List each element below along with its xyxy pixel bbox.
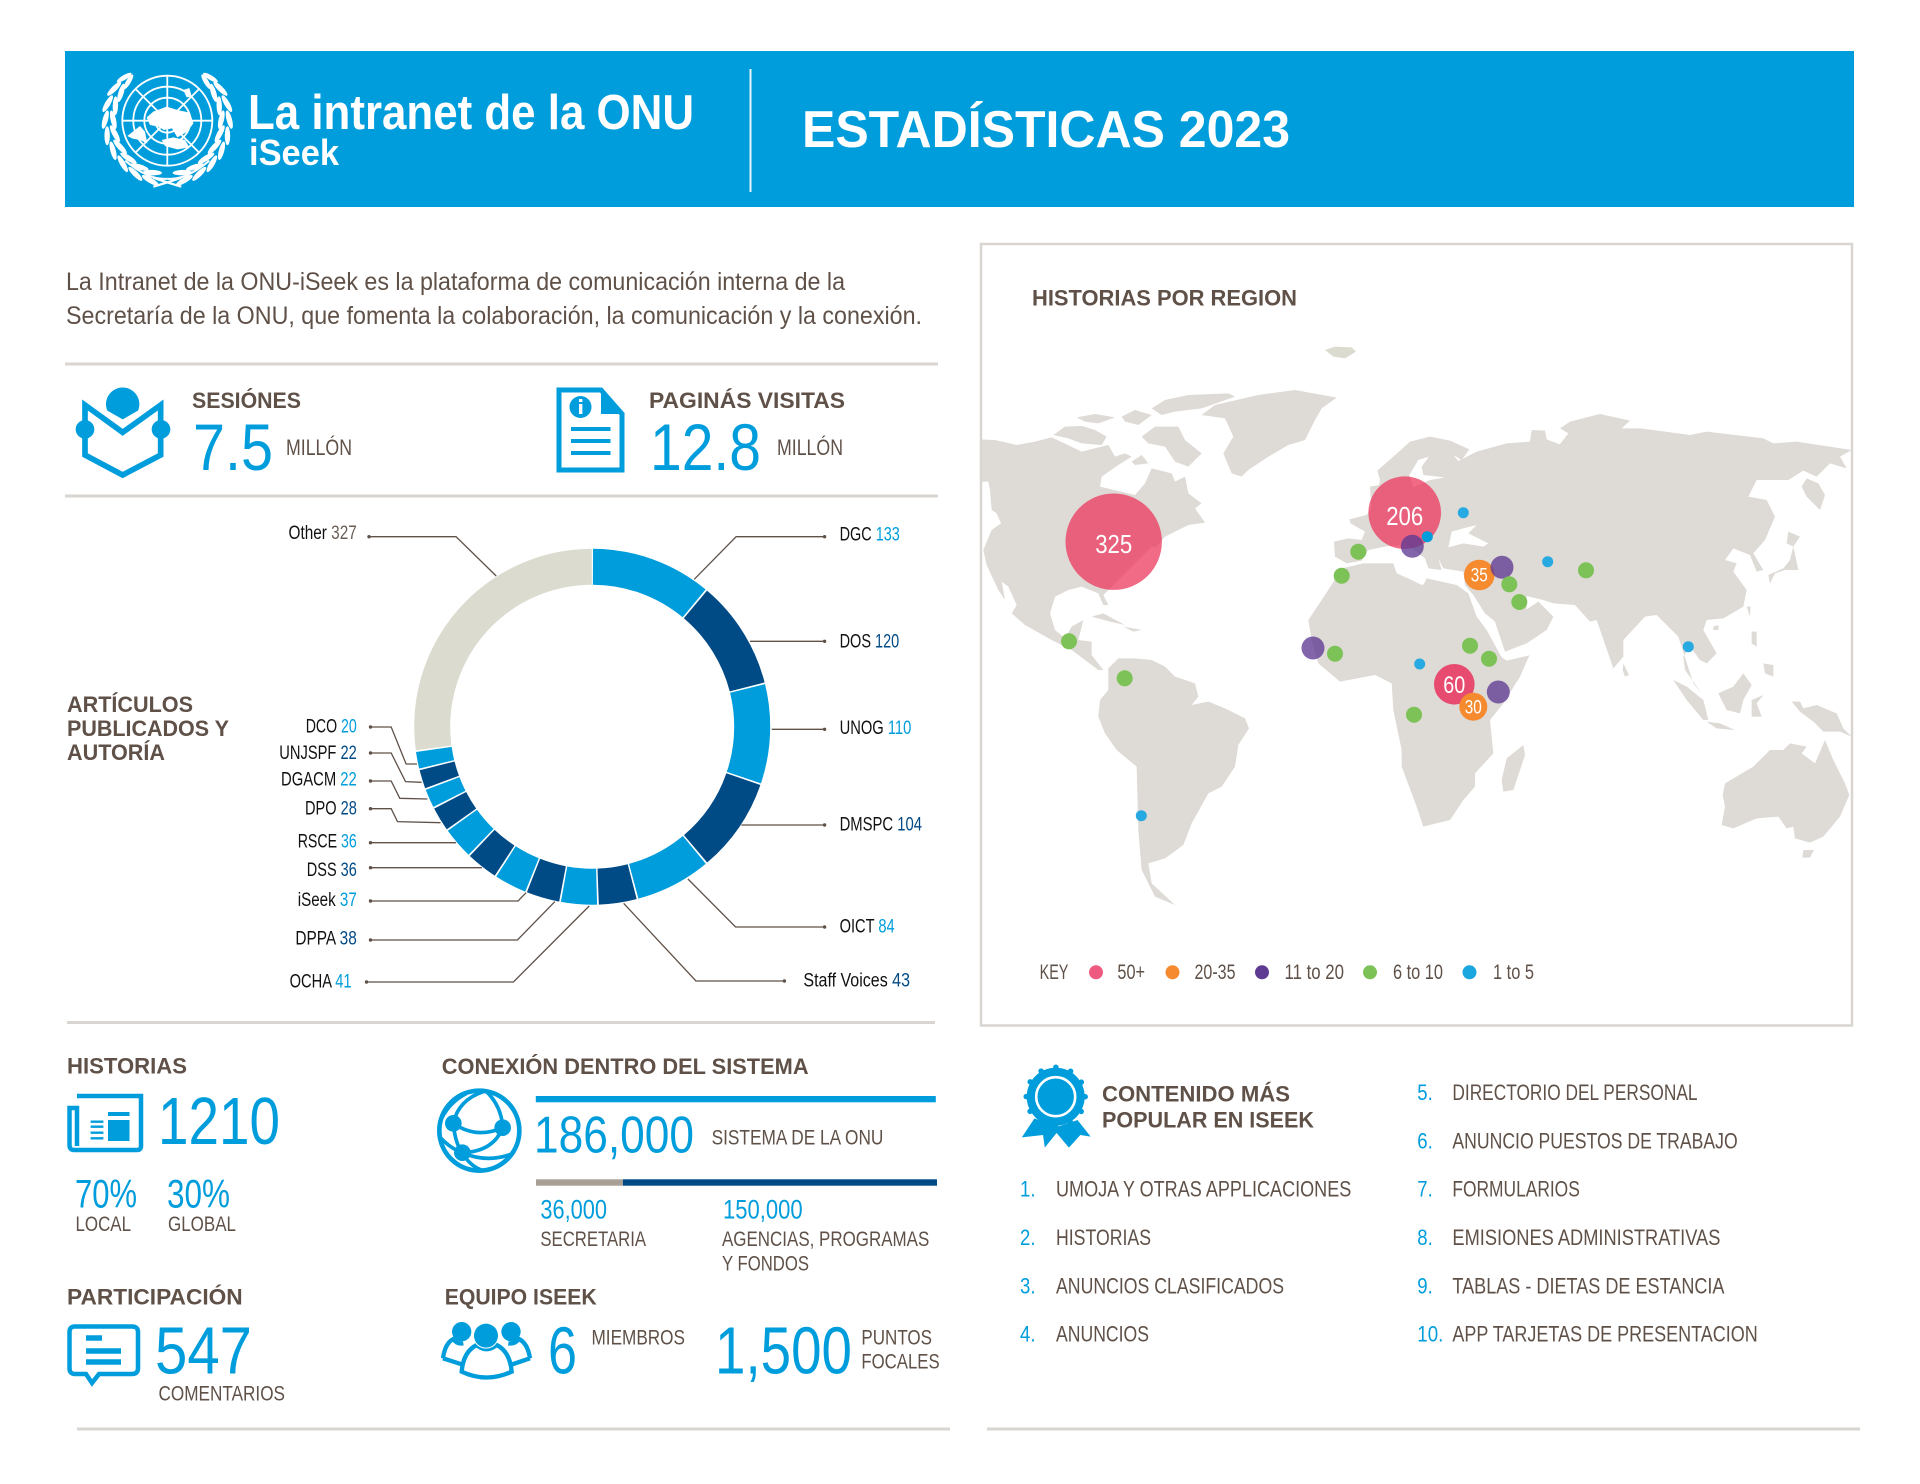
number: 1,500: 1,500 (715, 1313, 852, 1388)
heading: paginas visitas: PAGINÁS VISITAS (649, 388, 845, 413)
panel: participacion (67, 1284, 285, 1406)
stat: local 70%: LOCAL (76, 1212, 131, 1236)
icon: comment (70, 1326, 138, 1383)
ranked list: items 5 to 10: 5. (1417, 1080, 1433, 1105)
ranked list: items 1 to 4: 2. (1020, 1225, 1036, 1250)
label: puntos focales (861, 1325, 940, 1374)
stat: secretaria (540, 1194, 647, 1251)
donut labels left (279, 523, 357, 992)
ranked list: items 1 to 4: 3. (1020, 1273, 1036, 1298)
panel: historias por region (978, 244, 1852, 1026)
map key: 11 to 20 (1284, 961, 1344, 984)
ranked list: items 5 to 10: ANUNCIO PUESTOS DE TRABAJO (1452, 1128, 1738, 1153)
unit: millón: MILLÓN (286, 435, 352, 460)
label: comentarios: COMENTARIOS (158, 1382, 285, 1406)
donut labels left: DPPA 38 (295, 929, 357, 950)
map key: 6 to 10 (1393, 961, 1443, 984)
stat: agencias (722, 1194, 929, 1276)
panel: conexion dentro del sistema (439, 1054, 937, 1276)
heading: historias por region: HISTORIAS POR REGION (1032, 286, 1297, 310)
ranked list: items 1 to 4: HISTORIAS (1056, 1225, 1151, 1250)
heading: articulos publicados y autoria: PUBLICADOS Y (67, 716, 229, 741)
ranked list: items 1 to 4 (1020, 1177, 1351, 1347)
stat: global 30%: 30% (167, 1173, 230, 1217)
map key (1040, 961, 1534, 984)
leader lines (367, 537, 825, 982)
icon: document (559, 388, 625, 470)
ranked list: items 1 to 4: UMOJA Y OTRAS APPLICACIONES (1056, 1177, 1351, 1202)
title: La intranet de la ONU: La intranet de la ONU (248, 86, 694, 140)
unit: millón: MILLÓN (777, 435, 843, 460)
panel: sesiones (76, 387, 352, 484)
donut labels right: DMSPC 104 (840, 815, 922, 836)
markers: 1 to 5 (1136, 507, 1694, 821)
bubble: 325 stories (1066, 494, 1162, 590)
donut chart (432, 567, 752, 887)
ranked list: items 5 to 10 (1417, 1080, 1758, 1347)
number: 186,000: 186,000 (534, 1107, 694, 1165)
label: puntos focales: PUNTOS (861, 1325, 932, 1349)
heading: sesiones: SESIÓNES (192, 388, 301, 413)
donut labels left: iSeek 37 (298, 890, 357, 911)
icon: newspaper (70, 1096, 141, 1150)
intro text: La Intranet de la ONU-iSeek es la plataforma de comunicación interna de la (66, 268, 845, 296)
ranked list: items 1 to 4: ANUNCIOS (1056, 1322, 1149, 1347)
heading: contenido mas popular (1102, 1082, 1314, 1133)
bubble: 325 stories: 325 (1095, 529, 1132, 559)
label: puntos focales: FOCALES (861, 1350, 940, 1374)
donut labels left: Other 327 (288, 523, 357, 544)
heading: participacion: PARTICIPACIÓN (67, 1284, 243, 1309)
header banner (65, 51, 1854, 207)
ranked list: items 1 to 4: 4. (1020, 1322, 1036, 1347)
number: 6: 6 (548, 1313, 577, 1388)
ranked list: items 5 to 10: FORMULARIOS (1452, 1177, 1580, 1202)
donut labels left: RSCE 36 (298, 831, 357, 852)
donut labels left: DGACM 22 (281, 770, 357, 791)
subtitle: iSeek: iSeek (249, 132, 340, 173)
ranked list: items 5 to 10: TABLAS - DIETAS DE ESTANCIA (1452, 1273, 1725, 1298)
ranked list: items 5 to 10: 6. (1417, 1128, 1433, 1153)
bubble: 206 stories (1368, 476, 1441, 549)
heading: articulos publicados y autoria: AUTORÍA (67, 740, 165, 765)
ranked list: items 5 to 10: 7. (1417, 1177, 1433, 1202)
donut labels right (803, 525, 922, 992)
heading: contenido mas popular: CONTENIDO MÁS (1102, 1082, 1290, 1107)
bubble: 30 stories: 30 (1465, 698, 1482, 718)
heading: historias: HISTORIAS (67, 1053, 187, 1078)
map key: KEY (1040, 961, 1068, 984)
panel: paginas visitas (559, 388, 845, 484)
markers: 6 to 10 (1061, 544, 1594, 723)
icon: reader (76, 387, 170, 475)
icon: UN emblem (100, 71, 234, 187)
number: 547: 547 (155, 1313, 252, 1388)
number: 12.8: 12.8 (650, 410, 761, 484)
leader line end dots (365, 535, 826, 984)
ranked list: items 5 to 10: 8. (1417, 1225, 1433, 1250)
number: 1210: 1210 (158, 1084, 280, 1159)
panel: historias (67, 1053, 280, 1236)
heading: contenido mas popular: POPULAR EN ISEEK (1102, 1108, 1314, 1133)
label: miembros: MIEMBROS (592, 1325, 685, 1349)
panel: equipo iseek (443, 1284, 940, 1388)
heading: conexion: CONEXIÓN DENTRO DEL SISTEMA (442, 1054, 809, 1079)
donut labels left: DCO 20 (306, 717, 357, 738)
stat: global 30% (167, 1173, 236, 1236)
bubble: 35 stories: 35 (1471, 566, 1488, 586)
ranked list: items 5 to 10: EMISIONES ADMINISTRATIVAS (1452, 1225, 1720, 1250)
stat: secretaria: SECRETARIA (540, 1227, 647, 1251)
bubble: 60 stories: 60 (1443, 672, 1465, 699)
stat: global 30%: GLOBAL (168, 1212, 236, 1236)
bar: split (536, 1179, 937, 1186)
label: sistema de la onu: SISTEMA DE LA ONU (712, 1125, 883, 1149)
map key: 1 to 5 (1493, 961, 1534, 984)
icon: award ribbon (1022, 1067, 1091, 1148)
stat: agencias: AGENCIAS, PROGRAMAS (722, 1227, 929, 1251)
markers: 11 to 20 (1302, 535, 1514, 704)
world map (978, 347, 1852, 905)
donut labels right: OICT 84 (840, 916, 895, 937)
ranked list: items 1 to 4: 1. (1020, 1177, 1036, 1202)
donut labels left: OCHA 41 (290, 971, 352, 992)
panel: articulos publicados (67, 523, 922, 992)
stat: agencias: Y FONDOS (722, 1252, 809, 1276)
donut labels left: UNJSPF 22 (279, 743, 357, 764)
stat: secretaria: 36,000 (540, 1194, 607, 1224)
ranked list: items 5 to 10: APP TARJETAS DE PRESENTACION (1452, 1322, 1758, 1347)
icon: people (443, 1322, 530, 1377)
donut labels right: Staff Voices 43 (803, 971, 910, 992)
ranked list: items 5 to 10: DIRECTORIO DEL PERSONAL (1452, 1080, 1698, 1105)
heading: articulos publicados y autoria: ARTÍCULOS (67, 692, 193, 717)
ranked list: items 5 to 10: 9. (1417, 1273, 1433, 1298)
stat: agencias: 150,000 (723, 1194, 803, 1224)
ranked list: items 1 to 4: ANUNCIOS CLASIFICADOS (1056, 1273, 1284, 1298)
divider (750, 69, 752, 192)
bubble: 206 stories: 206 (1386, 501, 1423, 531)
donut labels left: DPO 28 (305, 799, 357, 820)
stat: local 70% (75, 1173, 137, 1236)
number: 7.5: 7.5 (193, 410, 273, 484)
bar: total (536, 1096, 936, 1102)
donut labels right: DGC 133 (840, 525, 900, 546)
donut labels right: DOS 120 (840, 631, 899, 652)
heading: articulos publicados y autoria (67, 692, 229, 765)
map key: 20-35 (1194, 961, 1236, 984)
intro text: Secretaría de la ONU, que fomenta la colaboración, la comunicación y la conexión. (66, 302, 922, 330)
bubble: 35 stories (1464, 560, 1495, 590)
heading: ESTADÍSTICAS 2023: ESTADÍSTICAS 2023 (802, 101, 1290, 159)
panel: contenido mas popular (1020, 1067, 1758, 1347)
ranked list: items 5 to 10: 10. (1417, 1322, 1443, 1347)
bubble: 30 stories (1459, 693, 1487, 721)
donut labels right: UNOG 110 (840, 718, 911, 739)
intro text (66, 268, 922, 330)
icon: network globe (439, 1091, 519, 1171)
map key: 50+ (1117, 961, 1145, 984)
bubble: 60 stories (1434, 664, 1475, 705)
heading: equipo iseek: EQUIPO ISEEK (445, 1284, 597, 1309)
donut labels left: DSS 36 (307, 860, 357, 881)
stat: local 70%: 70% (75, 1173, 137, 1217)
